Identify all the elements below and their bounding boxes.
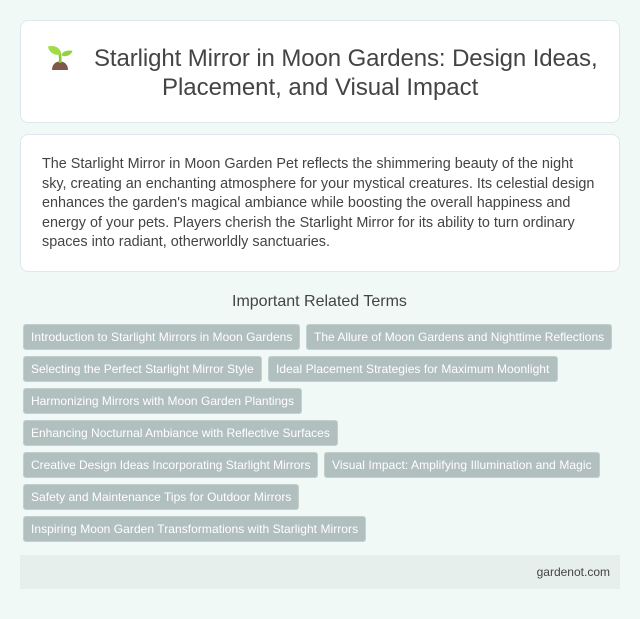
panel: description card (20, 134, 620, 272)
tag (23, 452, 318, 478)
tag (23, 484, 299, 510)
icon: seedling (48, 46, 72, 70)
text block: description: sky, creating an enchanting atmosphere for your mystical creatures. Its celestial design (42, 176, 594, 192)
tag: Enhancing Nocturnal Ambiance with Reflective Surfaces (31, 426, 330, 440)
title (94, 45, 598, 101)
tag: Creative Design Ideas Incorporating Starlight Mirrors (31, 458, 310, 472)
tag (23, 356, 262, 382)
title: Starlight Mirror in Moon Gardens: Design Ideas, (94, 45, 598, 72)
tag: The Allure of Moon Gardens and Nighttime Reflections (314, 330, 604, 344)
text block: description: The Starlight Mirror in Moon Garden Pet reflects the shimmering beauty of the night (42, 156, 573, 172)
text block: description: enhances the garden's magical ambiance while boosting the overall happiness and (42, 195, 570, 211)
tag (23, 516, 366, 542)
tag: Selecting the Perfect Starlight Mirror Style (31, 362, 254, 376)
footer text: gardenot.com (537, 565, 610, 579)
footer bar (20, 555, 620, 589)
tag (23, 388, 302, 414)
text block: description (42, 156, 594, 250)
tag: Inspiring Moon Garden Transformations with Starlight Mirrors (31, 522, 358, 536)
tag: Safety and Maintenance Tips for Outdoor Mirrors (31, 490, 291, 504)
tag: Ideal Placement Strategies for Maximum Moonlight (276, 362, 549, 376)
tag (23, 324, 300, 350)
text block: description: energy of your pets. Players cherish the Starlight Mirror for its ability to turn ordinary (42, 214, 575, 230)
title: Placement, and Visual Impact (162, 74, 478, 101)
panel: title card (20, 20, 620, 123)
tag: Introduction to Starlight Mirrors in Moon Gardens (31, 330, 292, 344)
tag (268, 356, 558, 382)
text block: description: spaces into radiant, otherworldly sanctuaries. (42, 234, 330, 250)
tag (23, 420, 338, 446)
tag (324, 452, 600, 478)
tag: Harmonizing Mirrors with Moon Garden Plantings (31, 394, 294, 408)
tag (306, 324, 612, 350)
tag list (23, 324, 612, 542)
tag: Visual Impact: Amplifying Illumination and Magic (332, 458, 592, 472)
heading: related terms: Important Related Terms (232, 293, 407, 310)
